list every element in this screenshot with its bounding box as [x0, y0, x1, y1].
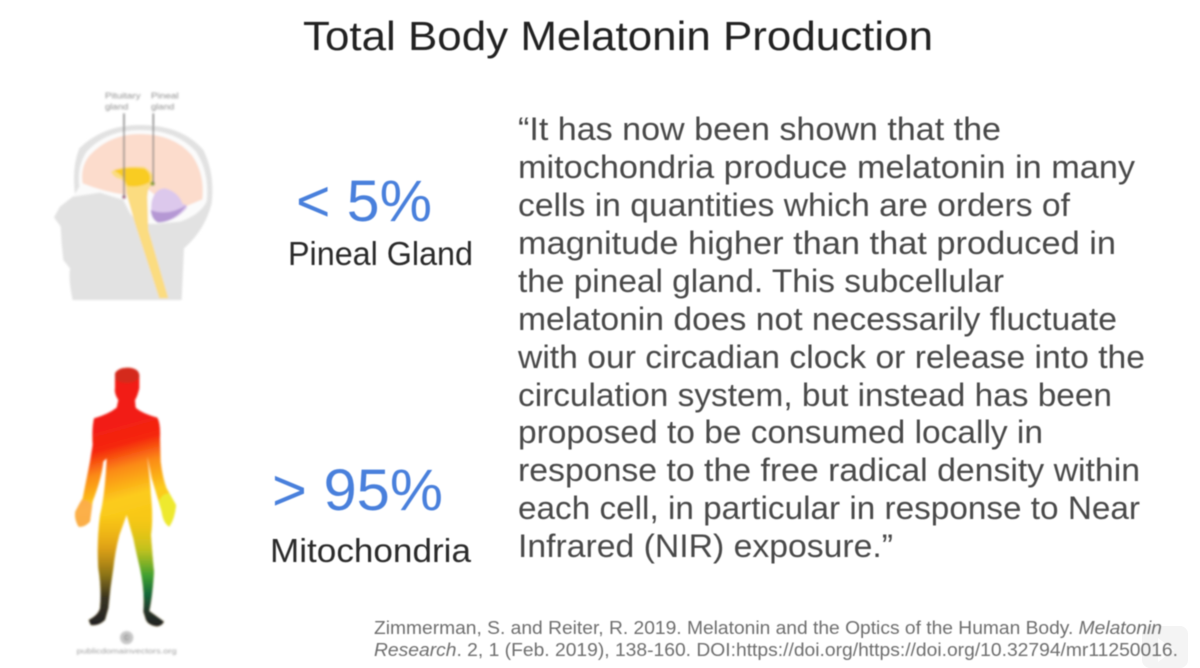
- gland labels: gland: [151, 102, 174, 111]
- quote text block: proposed to be consumed locally in: [518, 414, 1043, 450]
- quote text block: the pineal gland. This subcellular: [518, 263, 1004, 299]
- video play button overlay: [1142, 626, 1188, 668]
- skull ring: [73, 130, 207, 224]
- pituitary dot: [122, 195, 126, 199]
- quote text block: melatonin does not necessarily fluctuate: [518, 301, 1117, 337]
- citation: [374, 618, 1178, 660]
- quote text block: each cell, in particular in response to Near: [518, 490, 1140, 526]
- quote text block: [517, 111, 1145, 564]
- quote text block: circulation system, but instead has been: [518, 377, 1112, 413]
- cerebellum: [151, 188, 187, 223]
- corpus and spinal cord: [111, 166, 168, 298]
- gland labels: Pineal: [151, 92, 179, 101]
- head silhouette: [54, 125, 212, 300]
- citation: Research . 2, 1 (Feb. 2019), 138-160. DOI:https://doi.org/https://doi.org/10.32794/mr11250016.: [374, 640, 1178, 660]
- quote text block: with our circadian clock or release into the: [517, 339, 1145, 375]
- quote text block: cells in quantities which are orders of: [518, 187, 1070, 223]
- quote text block: Infrared (NIR) exposure.”: [518, 528, 893, 564]
- quote text block: magnitude higher than that produced in: [518, 225, 1116, 261]
- brain: [82, 134, 203, 206]
- stat: pineal gland share: Pineal Gland: [288, 235, 473, 272]
- leader lines: [124, 113, 153, 197]
- icon: human body heat-map silhouette: publicdomainvectors.org: [77, 647, 177, 656]
- gland labels: [105, 92, 179, 111]
- icon: head and brain illustration: [54, 92, 212, 300]
- stat: mitochondria share: Mitochondria: [270, 532, 472, 569]
- citation: Zimmerman, S. and Reiter, R. 2019. Melatonin and the Optics of the Human Body. Melatonin: [374, 618, 1162, 638]
- stat: mitochondria share: [270, 458, 472, 569]
- stat: pineal gland share: [288, 169, 473, 272]
- quote text block: mitochondria produce melatonin in many: [518, 149, 1135, 185]
- gland labels: Pituitary: [105, 92, 141, 101]
- quote text block: response to the free radical density within: [518, 452, 1140, 488]
- title: Total Body Melatonin Production: [303, 13, 933, 59]
- icon: human body heat-map silhouette: [70, 365, 180, 656]
- icon: human body heat-map silhouette: ©: [124, 634, 130, 643]
- stat: pineal gland share: < 5%: [296, 169, 432, 234]
- stat: mitochondria share: > 95%: [272, 458, 443, 523]
- pineal dot: [150, 181, 155, 186]
- quote text block: “It has now been shown that the: [518, 111, 1001, 147]
- gland labels: gland: [105, 102, 128, 111]
- copyright mark and source: [120, 631, 133, 644]
